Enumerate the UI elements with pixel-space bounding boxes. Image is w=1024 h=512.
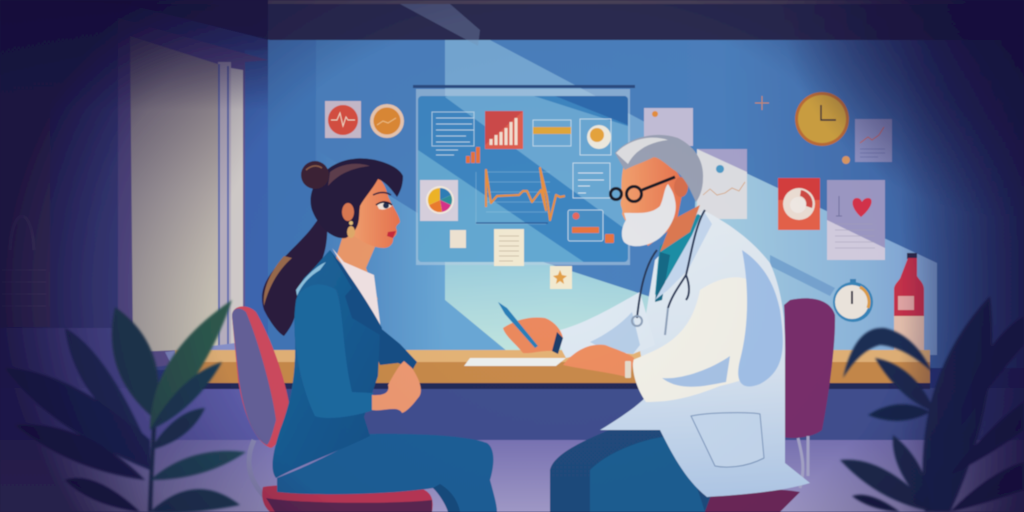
woman's chair	[232, 306, 433, 512]
sunburst widget	[580, 119, 611, 155]
coat shadow right	[738, 250, 783, 387]
doctor's chair seat	[650, 489, 800, 512]
jacket	[273, 250, 380, 478]
soft light left of lit patch	[316, 150, 445, 352]
far sleeve	[372, 326, 417, 369]
left wall top shadow	[0, 0, 268, 110]
wall poster left	[0, 105, 50, 327]
coat lapel	[655, 210, 712, 300]
hair bun	[301, 161, 329, 189]
shadow streak right wall	[770, 255, 835, 296]
face	[621, 155, 684, 246]
hair	[615, 135, 703, 202]
left plant	[5, 300, 246, 512]
bottle	[894, 253, 924, 350]
cuff	[552, 332, 563, 354]
pie chart tile	[420, 180, 458, 221]
stethoscope	[632, 210, 705, 335]
shirt and collar	[655, 214, 705, 295]
left wall	[0, 0, 268, 370]
woman	[262, 158, 497, 512]
desk	[175, 350, 930, 389]
chart board	[412, 84, 636, 267]
back wall	[268, 38, 1024, 368]
glasses	[610, 177, 675, 202]
face	[350, 170, 400, 248]
wristwatch	[625, 361, 631, 378]
clipboard note	[494, 229, 524, 266]
line chart poster	[697, 149, 747, 219]
blouse	[332, 248, 381, 330]
ECG chart	[476, 168, 565, 224]
text list panel	[432, 112, 474, 155]
board light bands	[418, 96, 628, 262]
tie	[655, 252, 670, 302]
heart-rate icon tile	[325, 101, 361, 138]
red donut card	[778, 178, 820, 230]
star note	[550, 266, 572, 289]
light patch centre wall	[445, 230, 660, 352]
right edge shadow	[900, 0, 1024, 512]
right plant	[840, 296, 1024, 512]
floor	[0, 440, 1024, 512]
window	[118, 18, 268, 372]
ponytail	[262, 212, 327, 336]
doctor	[498, 135, 810, 512]
paper on desk	[464, 358, 566, 366]
hair	[311, 158, 403, 238]
shoulder highlight	[296, 262, 326, 296]
ear	[674, 177, 688, 197]
small orange tag	[605, 234, 614, 243]
pocket	[691, 413, 764, 467]
coat sleeve near	[633, 277, 780, 402]
small note	[450, 230, 466, 248]
light patch lower shadow	[445, 300, 508, 352]
board rail	[413, 85, 635, 88]
upper light band	[445, 40, 660, 180]
window sill	[165, 342, 243, 362]
small orange bars	[466, 147, 480, 163]
ceiling	[0, 0, 1024, 40]
legs	[277, 434, 497, 512]
orange dot	[842, 156, 850, 164]
light patch right wall	[690, 150, 937, 355]
table widget	[533, 120, 571, 146]
info list panel	[573, 163, 610, 198]
top edge strip	[0, 0, 1024, 4]
earring	[347, 221, 355, 238]
stopwatch	[833, 279, 873, 322]
chair seat	[262, 484, 433, 512]
sleeve fold	[662, 356, 730, 387]
hand on desk	[563, 345, 634, 378]
corner shadow top right	[780, 0, 1024, 220]
ear	[342, 203, 354, 221]
coat sleeve far	[559, 292, 655, 358]
beard	[622, 184, 676, 246]
trend note	[855, 119, 892, 162]
bar chart tile	[485, 111, 523, 149]
neck	[336, 232, 378, 300]
wall clock	[795, 92, 849, 146]
eye	[373, 192, 392, 210]
orange gauge icon	[370, 104, 404, 138]
ceiling beam	[400, 4, 480, 46]
lab coat	[600, 210, 810, 497]
heart poster	[827, 180, 885, 260]
pinned note top	[644, 108, 693, 146]
pen	[498, 302, 538, 348]
lapel	[330, 250, 382, 335]
trousers	[550, 412, 720, 512]
lower left wall	[0, 328, 130, 388]
under-desk wall	[130, 388, 1024, 444]
doctor's chair	[650, 298, 835, 512]
hands	[372, 361, 421, 413]
lips	[387, 231, 396, 238]
alert widget	[568, 210, 603, 241]
far sleeve shadow	[590, 312, 640, 354]
neck	[660, 205, 700, 252]
near sleeve	[294, 285, 374, 418]
plus sign	[755, 96, 769, 110]
hand with pen	[503, 317, 563, 353]
